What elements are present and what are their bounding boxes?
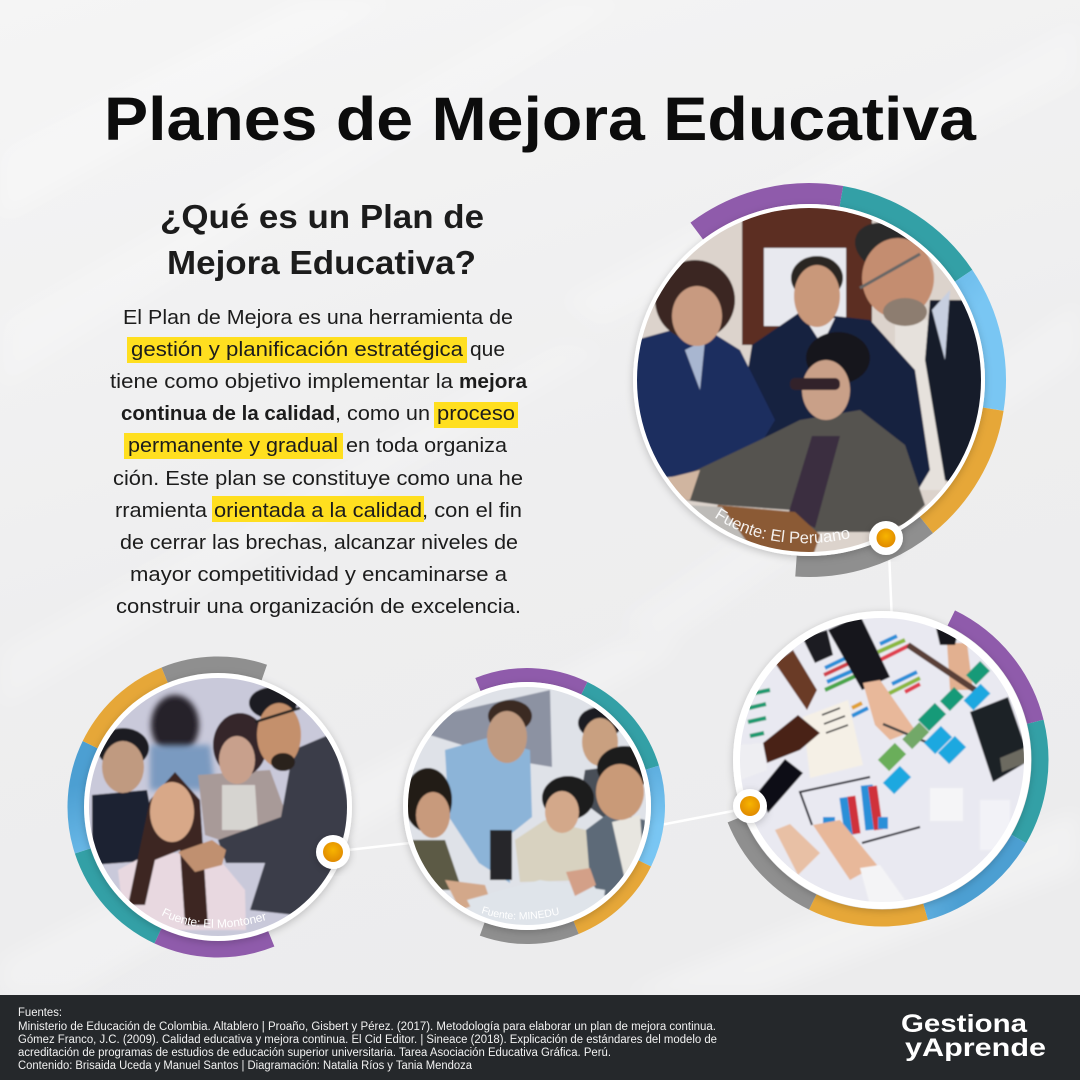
connector lines xyxy=(348,552,892,850)
photo circle: team at computer xyxy=(630,183,1006,577)
photo caption: Fuente: El Peruano xyxy=(715,508,850,544)
body paragraph: en toda organiza xyxy=(346,434,508,457)
photo caption: Fuente: El Montoner xyxy=(162,908,266,928)
body paragraph: El Plan de Mejora es una herramienta de xyxy=(123,306,513,329)
sources: Contenido: Brisaida Uceda y Manuel Santos | Diagramación: Natalia Ríos y Tania Mendoza xyxy=(18,1060,473,1072)
subheading: Mejora Educativa? xyxy=(167,244,476,281)
photo xyxy=(637,208,981,552)
sources: Fuentes: xyxy=(18,1007,62,1019)
body paragraph: permanente y gradual xyxy=(128,434,338,457)
white frame xyxy=(633,204,985,556)
body paragraph: gestión y planificación estratégica xyxy=(131,338,464,361)
sources xyxy=(18,1007,717,1072)
connector dot xyxy=(733,789,767,823)
photo caption: Fuente: MINEDU xyxy=(482,906,558,920)
body paragraph xyxy=(110,306,528,618)
body paragraph: mejora xyxy=(459,370,528,393)
body paragraph: construir una organización de excelencia. xyxy=(116,595,521,618)
photo xyxy=(85,675,355,945)
photo xyxy=(404,685,653,930)
body paragraph: , como un xyxy=(335,402,430,425)
body paragraph: orientada a la calidad xyxy=(214,499,422,522)
connector dot xyxy=(316,835,350,869)
sources: acreditación de programas de estudios de educación superior universitaria. Tarea Asociación Educativa Gráfica. Perú. xyxy=(18,1047,611,1059)
white frame xyxy=(733,611,1031,909)
body paragraph: que xyxy=(470,338,505,361)
title: Planes de Mejora Educativa xyxy=(104,85,977,153)
white frame xyxy=(84,673,352,941)
body paragraph: mayor competitividad y encaminarse a xyxy=(130,563,508,586)
connector dot top xyxy=(869,521,903,555)
progress ring xyxy=(666,544,1080,976)
body paragraph: continua de la calidad xyxy=(121,402,335,425)
progress ring xyxy=(547,118,1071,642)
progress ring xyxy=(28,617,408,997)
body paragraph: proceso xyxy=(437,402,515,425)
sources: Ministerio de Educación de Colombia. Altablero | Proaño, Gisbert y Pérez. (2017). Metodología para elaborar un plan de mejora continua. xyxy=(18,1021,716,1033)
body paragraph: rramienta xyxy=(115,499,208,522)
subheading xyxy=(160,198,484,281)
panel: definition text xyxy=(110,198,528,618)
photo circle: teacher with students xyxy=(400,668,665,944)
subheading: ¿Qué es un Plan de xyxy=(160,198,484,235)
body paragraph: , con el fin xyxy=(422,499,522,522)
white frame xyxy=(403,682,651,930)
footer band xyxy=(0,995,1080,1080)
logo: yAprende xyxy=(905,1034,1046,1062)
photo xyxy=(735,615,1030,905)
progress ring xyxy=(352,631,702,981)
logo xyxy=(901,1010,1046,1062)
logo: Gestiona xyxy=(901,1010,1028,1038)
body paragraph: de cerrar las brechas, alcanzar niveles de xyxy=(120,531,518,554)
photo circle: desk with charts xyxy=(728,610,1048,926)
body paragraph: tiene como objetivo implementar la xyxy=(110,370,454,393)
sources: Gómez Franco, J.C. (2009). Calidad educativa y mejora continua. El Cid Editor. | Sineace (2018). Explicación de estándares del modelo de xyxy=(18,1034,717,1046)
body paragraph: ción. Este plan se constituye como una he xyxy=(113,467,523,490)
photo circle: teacher pointing xyxy=(68,656,356,958)
yellow highlights xyxy=(124,337,518,522)
